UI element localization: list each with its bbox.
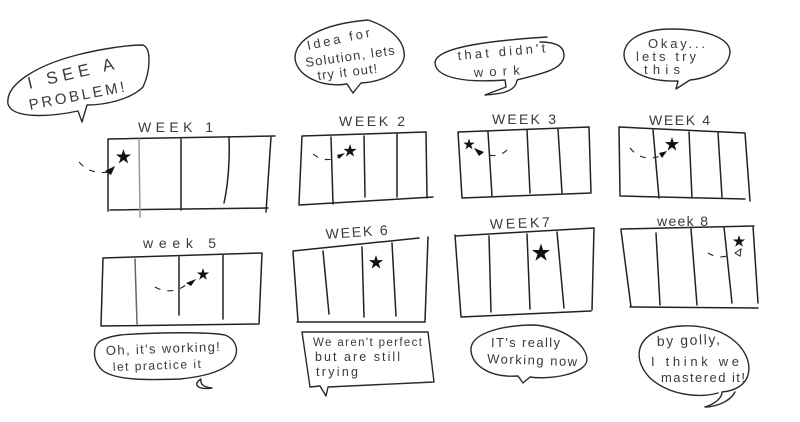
- panel: week 2: [299, 113, 433, 205]
- arrow: week 5: [155, 279, 196, 291]
- speech bubble: we aren't perfect: but are still: [315, 350, 400, 364]
- heading: week 8: week 8: [656, 213, 708, 229]
- speech bubble: oh, it's working: [94, 333, 236, 388]
- heading: week 3: WEEK 3: [492, 111, 556, 127]
- speech bubble: that didn't work: [435, 37, 564, 95]
- heading: week 7: WEEK7: [490, 214, 550, 232]
- speech bubble: we aren't perfect: trying: [316, 365, 358, 379]
- heading: week 4: WEEK 4: [649, 112, 710, 128]
- arrow: week 3: [474, 148, 507, 156]
- speech bubble: I see a problem: [8, 45, 149, 122]
- speech bubble: by golly, I think we mastered it: mastered it!: [661, 370, 745, 385]
- star: week 6: [369, 255, 383, 269]
- panel: week 7: [455, 214, 594, 317]
- speech bubble: it's really working now: [471, 325, 587, 383]
- speech bubble: by golly, I think we mastered it: [639, 326, 749, 407]
- speech bubble: it's really working now: IT's really: [491, 335, 560, 350]
- grid: week 7: [455, 228, 594, 317]
- speech bubble: I see a problem: PROBLEM!: [28, 79, 126, 114]
- speech bubble: idea for solution: Idea for: [306, 25, 372, 53]
- speech bubble: idea for solution: Solution, lets: [304, 43, 396, 70]
- speech bubble: by golly, I think we mastered it: by golly,: [657, 331, 720, 349]
- panel: week 8: [621, 213, 758, 308]
- heading: week 1: WEEK 1: [138, 119, 213, 135]
- arrow: week 2: [313, 153, 345, 160]
- speech bubble: okay, let's try this: Okay...: [648, 36, 705, 51]
- speech bubble: oh, it's working: let practice it: [113, 357, 202, 374]
- grid: week 8: [621, 226, 758, 308]
- arrow: week 4: [630, 148, 667, 158]
- speech bubble: we aren't perfect: We aren't perfect: [313, 337, 423, 349]
- speech bubble: okay, let's try this: this: [644, 62, 680, 77]
- heading: week 6: WEEK 6: [325, 222, 388, 242]
- speech bubble: idea for solution: try it out!: [317, 61, 378, 83]
- speech bubble: we aren't perfect: [302, 332, 434, 396]
- heading: week 2: WEEK 2: [339, 113, 405, 129]
- star: week 7: [532, 244, 550, 261]
- star: week 5: [197, 268, 209, 280]
- grid: week 1: [108, 136, 275, 217]
- arrow: week 8: [708, 249, 741, 257]
- speech bubble: okay, let's try this: [624, 29, 730, 89]
- star: week 4: [665, 137, 679, 151]
- speech bubble: that didn't work: work: [472, 63, 521, 80]
- speech bubble: it's really working now: Working now: [487, 351, 578, 369]
- grid: week 5: [101, 253, 262, 326]
- grid: week 4: [619, 127, 750, 201]
- panel: week 5: [101, 235, 262, 326]
- speech bubble: okay, let's try this: lets try: [636, 49, 696, 64]
- grid: week 6: [293, 237, 428, 322]
- speech bubble: by golly, I think we mastered it: I think we: [651, 354, 739, 369]
- speech bubble: I see a problem: I SEE A: [26, 54, 116, 93]
- star: week 2: [343, 144, 357, 157]
- speech bubble: oh, it's working: Oh, it's working!: [106, 339, 220, 358]
- speech bubble: idea for solution: [295, 20, 404, 93]
- panel: week 6: [293, 222, 428, 322]
- star: week 3: [463, 138, 475, 149]
- panel: week 3: [458, 111, 591, 198]
- arrow: week 1: [79, 162, 115, 175]
- speech bubble: that didn't work: that didn't: [457, 40, 546, 63]
- star: week 1: [116, 149, 131, 163]
- star: week 8: [733, 235, 745, 247]
- heading: week 5: week 5: [142, 235, 216, 251]
- panel: week 4: [619, 112, 750, 201]
- grid: week 3: [458, 127, 591, 198]
- grid: week 2: [299, 132, 433, 205]
- panel: week 1: [79, 119, 275, 217]
